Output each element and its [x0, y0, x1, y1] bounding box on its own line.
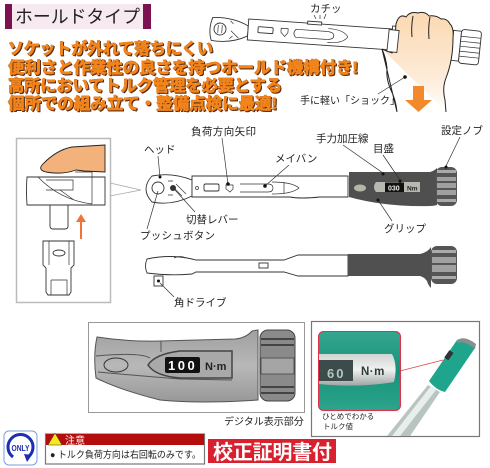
icon: top wrench [209, 13, 405, 54]
text block: orange feature copy: ソケットが外れて落ちにくい [8, 39, 213, 58]
panel: push button detail inset [16, 138, 141, 302]
icon: dark grip with dial [349, 168, 437, 206]
caption: デジタル表示部分: デジタル表示部分 [224, 415, 304, 428]
icon: grip enlargement: N·m [205, 361, 227, 373]
text block: orange feature copy: 便利さと作業性の良さを持つホールド機構付き! [8, 58, 358, 77]
text block: orange feature copy: 高所においてトルク管理を必要とする [8, 76, 282, 95]
icon: knob enlargement [260, 330, 295, 401]
label: グリップ [376, 198, 426, 235]
icon: grip enlargement [95, 330, 258, 402]
photo: close-up of 60 N·m: N·m [361, 366, 385, 378]
icon: grip enlargement: 100 [168, 358, 197, 373]
panel: photo of torque value [312, 322, 480, 436]
label: ヘッド: ヘッド [144, 144, 176, 156]
text block: orange feature copy [8, 39, 358, 113]
photo: close-up of 60 N·m: 60 [327, 366, 345, 381]
label: 設定ノブ [441, 124, 483, 168]
label: カチッ: カチッ [310, 3, 342, 15]
icon: ONLY right rotation: ONLY [12, 444, 30, 453]
label: 角ドライブ [160, 283, 227, 309]
icon: grip [348, 247, 431, 288]
illustration: wrench side view [146, 246, 457, 288]
icon: handle body with nameplate [192, 176, 348, 198]
badge: 校正証明書付: 校正証明書付 [213, 441, 332, 464]
label: 手力加圧線: 手力加圧線 [316, 132, 369, 145]
label: 手力加圧線 [316, 132, 384, 176]
arrow: up [76, 214, 86, 239]
label: 設定ノブ: 設定ノブ [441, 124, 483, 137]
caption: ひとめでわかるトルク値: トルク値 [323, 421, 353, 431]
icon: knob [431, 246, 457, 284]
label: 負荷方向矢印: 負荷方向矢印 [191, 125, 256, 138]
heading: ホールドタイプ: ホールドタイプ [15, 7, 140, 27]
icon: finger pressing button [41, 145, 105, 173]
label: メイバン [263, 153, 317, 188]
icon: wrench photo [387, 338, 476, 436]
label: プッシュボタン: プッシュボタン [140, 230, 215, 242]
label: 負荷方向矢印 [191, 125, 256, 186]
label: 切替レバー: 切替レバー [186, 213, 238, 226]
label: プッシュボタン [140, 191, 215, 242]
label: 角ドライブ: 角ドライブ [174, 296, 227, 309]
caption: ひとめでわかるトルク値: ひとめでわかる [322, 412, 374, 421]
callout: caution: 注意 [65, 434, 85, 447]
callout: caution [46, 433, 204, 464]
panel: digital display detail [88, 322, 304, 412]
illustration: wrench held in hand [209, 3, 482, 112]
icon: hand [382, 12, 453, 112]
icon: socket [43, 241, 74, 295]
label: 目盛 [373, 142, 402, 182]
label: 手に軽い「ショック」: 手に軽い「ショック」 [300, 94, 400, 107]
text block: orange feature copy: 個所での組み立て・整備点検に最適! [8, 94, 277, 113]
label: ヘッド [144, 144, 176, 178]
illustration: wrench top view [146, 167, 457, 206]
icon: wrench head section [26, 172, 105, 205]
label: 手に軽い「ショック」 [300, 75, 407, 107]
icon: dark grip with dial: Nm [407, 186, 418, 192]
icon: warning triangle [48, 433, 62, 445]
icon: adjustment knob [450, 28, 482, 65]
heading: ホールドタイプ [5, 4, 151, 29]
callout: caution: ● トルク負荷方向は右回転のみです。 [50, 448, 201, 461]
label: グリップ: グリップ [384, 222, 426, 235]
icon: down arrow [405, 86, 432, 112]
icon: square drive [154, 276, 163, 286]
label: 目盛: 目盛 [373, 142, 394, 155]
icon: setting knob [436, 167, 457, 206]
label: 切替レバー [175, 190, 238, 226]
icon: dark grip with dial: 030 [388, 186, 400, 192]
icon: head [146, 175, 192, 203]
icon: ONLY right rotation [4, 431, 37, 465]
icon: square drive [50, 205, 68, 229]
photo: close-up of 60 N·m [318, 332, 400, 410]
caption: ひとめでわかるトルク値 [322, 412, 374, 431]
label: メイバン: メイバン [275, 153, 317, 165]
